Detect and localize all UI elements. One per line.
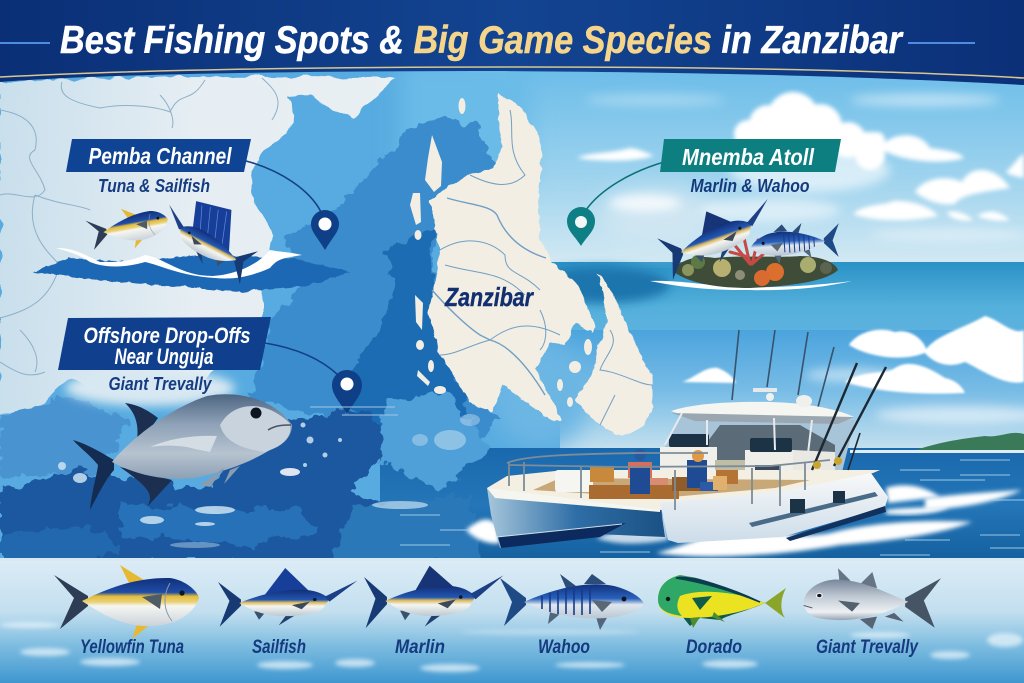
title: Best Fishing Spots & Big Game Species in Zanzibar: [60, 19, 904, 62]
species: Yellowfin Tuna: Yellowfin Tuna: [80, 637, 184, 658]
hard top: [671, 402, 854, 421]
species: Dorado: Dorado: [686, 637, 742, 658]
seating and anglers: [555, 449, 738, 499]
Pemba banner: Pemba Channel: [88, 143, 232, 169]
water splatter: [58, 414, 480, 548]
deck: [487, 470, 880, 510]
species: Dorado: [658, 575, 786, 658]
Offshore banner: Offshore Drop-Offs: [84, 323, 250, 348]
fish: giant trevally: [73, 394, 292, 510]
open-water patches: [0, 118, 500, 561]
coral atoll: [650, 238, 852, 290]
Mnemba species text: Marlin & Wahoo: [690, 176, 810, 196]
fish: tuna: [84, 201, 172, 256]
starboard hull: [660, 473, 888, 543]
cabin: [665, 418, 855, 480]
Pemba species text: Tuna & Sailfish: [98, 176, 210, 196]
curve to Pemba pin: [246, 161, 321, 212]
panel: Pemba Channel: [33, 139, 350, 292]
species: Wahoo: Wahoo: [538, 637, 590, 658]
species: Marlin: [364, 566, 503, 658]
Offshore banner: Near Unguja: [114, 344, 214, 369]
species: Sailfish: [218, 568, 357, 658]
species: Yellowfin Tuna: [54, 565, 199, 658]
curve to Unguja pin: [265, 343, 338, 375]
sea ripples: [400, 460, 1024, 555]
Mnemba pin: [567, 207, 595, 246]
Pemba banner: [66, 139, 251, 172]
mainland: [0, 76, 397, 415]
clouds lower: [682, 316, 1024, 394]
header banner: [0, 0, 1024, 85]
species: Giant Trevally: [804, 568, 941, 658]
railing: [507, 453, 830, 510]
Offshore species text: Giant Trevally: [108, 374, 212, 394]
label: Zanzibar: Zanzibar: [444, 282, 535, 312]
panel: Offshore Drop-Offs: [58, 317, 398, 510]
Zanzibar island map: [410, 93, 653, 437]
port hull: [487, 488, 665, 548]
Mnemba banner: [660, 139, 841, 172]
fish: sailfish: [152, 184, 269, 285]
species: Sailfish: Sailfish: [252, 637, 306, 658]
catamaran fishing boat: [466, 330, 1022, 556]
Offshore banner: [58, 317, 271, 370]
species: Marlin: Marlin: [395, 637, 445, 658]
distant green island: [912, 433, 1024, 452]
fishing rods: [812, 363, 886, 470]
clouds upper: [577, 92, 1024, 221]
species: Wahoo: [500, 574, 644, 658]
wake: [466, 485, 1022, 556]
Unguja pin: [332, 370, 362, 414]
fish: wahoo: [750, 220, 841, 266]
masts and antennas: [732, 330, 834, 407]
curve to Mnemba pin: [586, 162, 664, 210]
Pemba pin: [311, 210, 339, 250]
fish: marlin: [654, 191, 783, 280]
species strip: [0, 558, 1024, 683]
Mnemba banner: Mnemba Atoll: [682, 144, 815, 170]
species: Giant Trevally: Giant Trevally: [816, 637, 919, 658]
waves under Pemba fish: [33, 248, 350, 292]
panel: Mnemba Atoll: [567, 139, 852, 290]
